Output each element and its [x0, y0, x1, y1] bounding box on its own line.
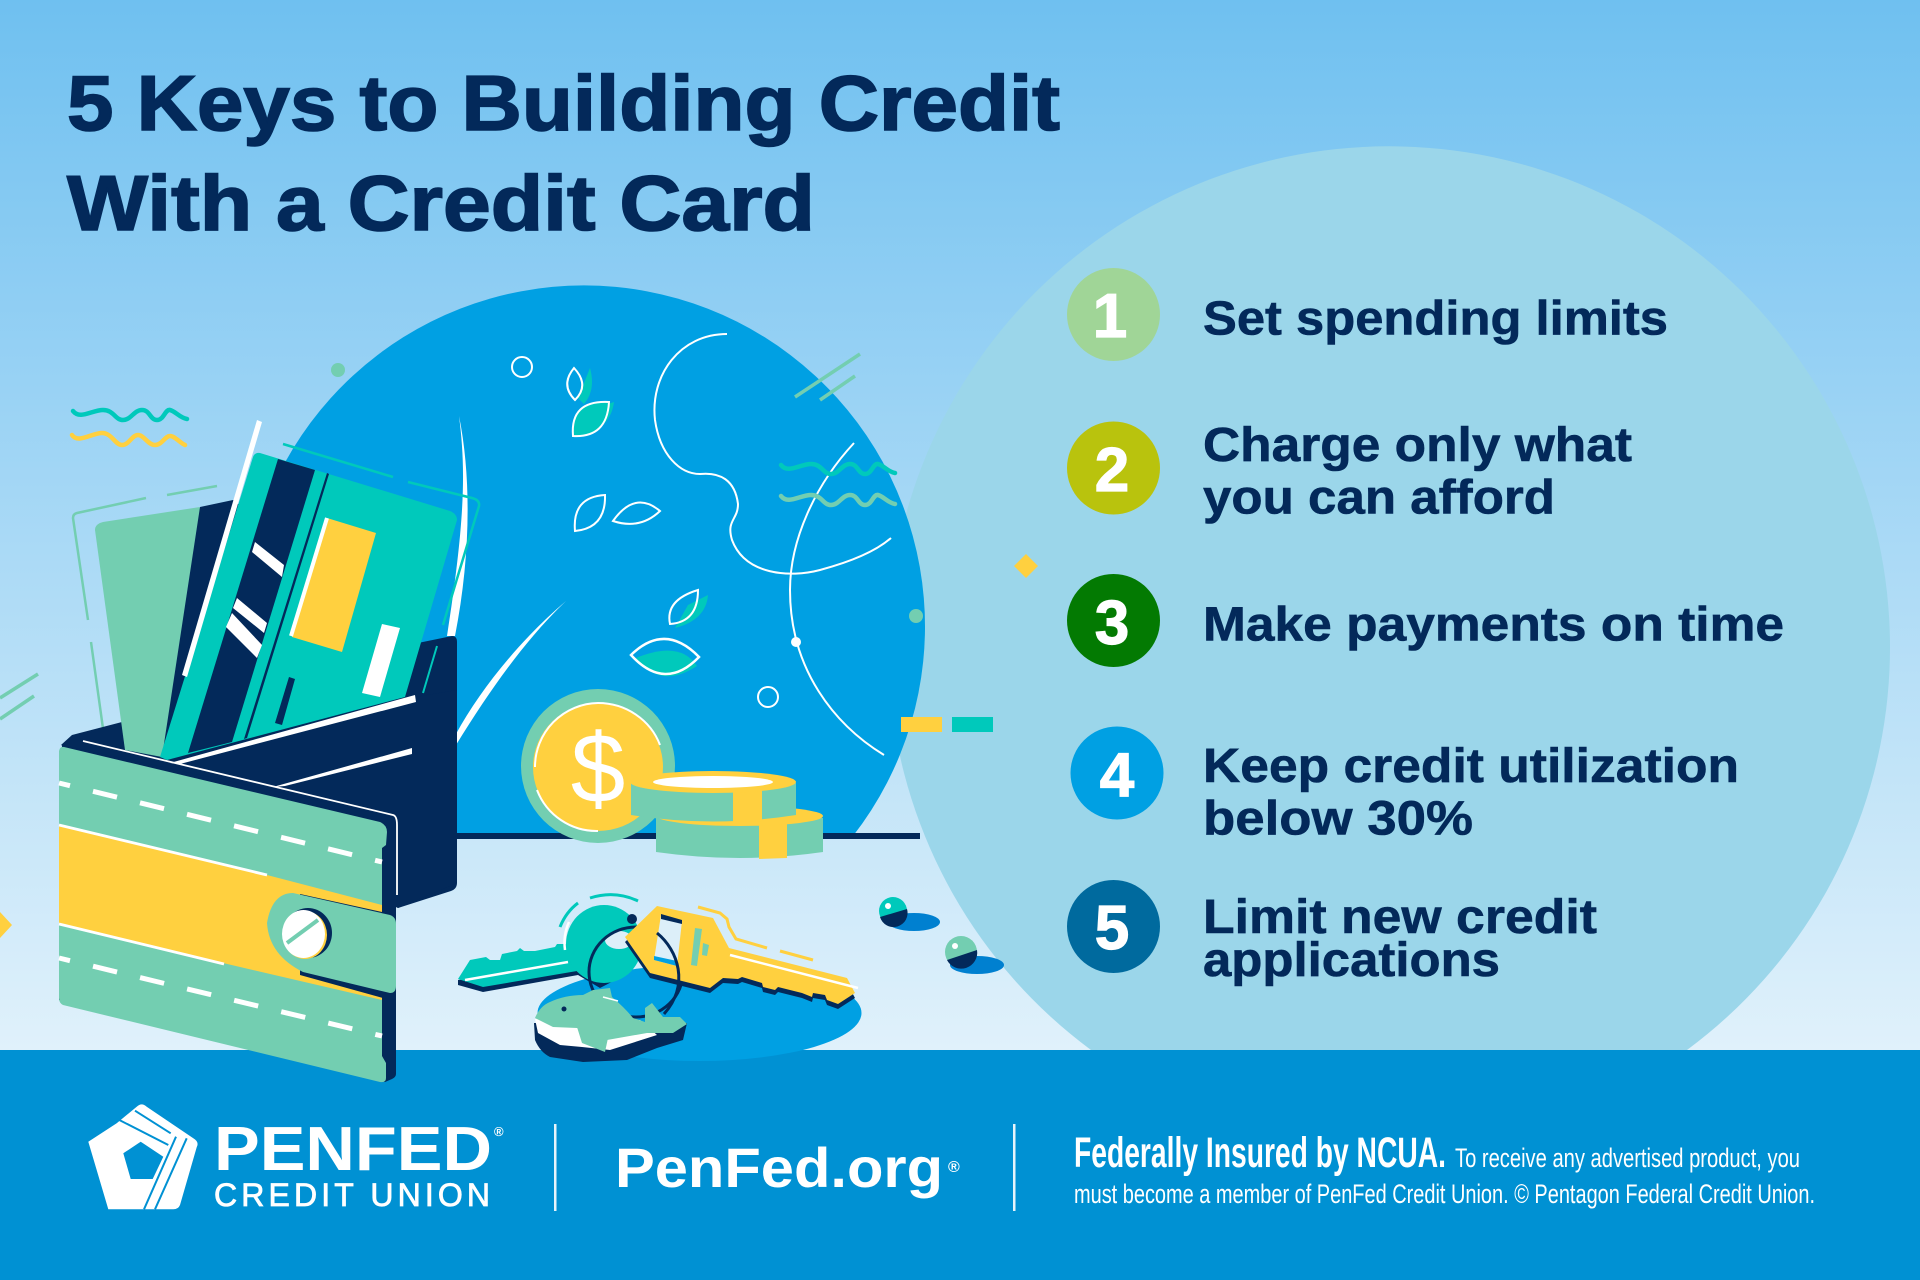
list item 1	[1067, 268, 1668, 361]
legal disclaimer: Federally Insured by NCUA.	[1074, 1129, 1446, 1177]
decorative mint dots	[331, 363, 923, 623]
list item 3: 3	[1095, 589, 1129, 658]
divider	[554, 1124, 556, 1211]
list item 5: applications	[1203, 934, 1500, 987]
list item 2: you can afford	[1203, 472, 1555, 524]
illustration: blue circle backdrop	[243, 285, 925, 836]
list item 4: below 30%	[1203, 792, 1473, 846]
wallet clasp	[300, 894, 396, 1000]
decorative diamonds	[0, 554, 1038, 938]
wallet snap button	[282, 908, 332, 959]
website url: ®	[948, 1159, 960, 1176]
list item 4: Keep credit utilization	[1203, 740, 1739, 793]
decorative bars	[901, 717, 993, 732]
icon: teal key	[458, 895, 642, 992]
list item 4	[1070, 726, 1739, 846]
title	[67, 59, 1060, 247]
illustration: blue ellipse under keys	[538, 965, 862, 1061]
footer band	[0, 1050, 1920, 1280]
logo: PenFed mark	[88, 1104, 198, 1209]
wallet yellow band	[59, 826, 382, 1000]
floor line	[456, 833, 920, 839]
legal disclaimer: To receive any advertised product, you	[1455, 1143, 1800, 1173]
teal credit card	[160, 444, 479, 760]
list item 3	[1067, 574, 1784, 667]
white card edge	[182, 420, 262, 677]
decorative waves	[72, 410, 895, 505]
list item 2: 2	[1095, 436, 1129, 505]
wallet flap	[170, 690, 457, 908]
list item 5: 5	[1095, 894, 1129, 963]
logo: wordmark: CREDIT UNION	[214, 1177, 490, 1213]
divider	[1013, 1124, 1016, 1211]
title: With a Credit Card	[67, 159, 815, 247]
title: 5 Keys to Building Credit	[67, 59, 1060, 147]
icon: whale keychain	[534, 988, 687, 1062]
list item 2: Charge only what	[1203, 419, 1632, 472]
panel: light circle behind list	[888, 146, 1890, 1050]
wallet front	[59, 745, 396, 1082]
legal disclaimer	[1074, 1129, 1815, 1209]
wallet inner back	[61, 500, 457, 908]
list item 1: 1	[1093, 282, 1127, 351]
list item 5: Limit new credit	[1203, 891, 1597, 944]
icon: yellow key	[625, 906, 858, 1014]
mint card	[95, 507, 200, 757]
list item 1: Set spending limits	[1203, 292, 1668, 346]
list item 2	[1067, 419, 1632, 524]
icon: key ring back	[589, 927, 683, 1017]
icon: leaves	[567, 368, 708, 676]
decorative slashes	[0, 354, 860, 719]
logo: wordmark: PENFED	[214, 1115, 492, 1184]
icon: marbles	[879, 897, 1004, 974]
mint card outline	[73, 486, 217, 743]
icon: coins	[521, 689, 823, 859]
list item 3: Make payments on time	[1203, 598, 1784, 652]
list item 4: 4	[1100, 741, 1135, 810]
website url: PenFed.org	[615, 1136, 943, 1199]
wallet stitching	[59, 783, 382, 1036]
logo: wordmark	[214, 1115, 504, 1213]
icon: coins: $	[571, 713, 625, 823]
icon: wallet with cards	[59, 420, 479, 1082]
logo: wordmark: ®	[494, 1124, 504, 1139]
list item 5	[1067, 880, 1597, 987]
